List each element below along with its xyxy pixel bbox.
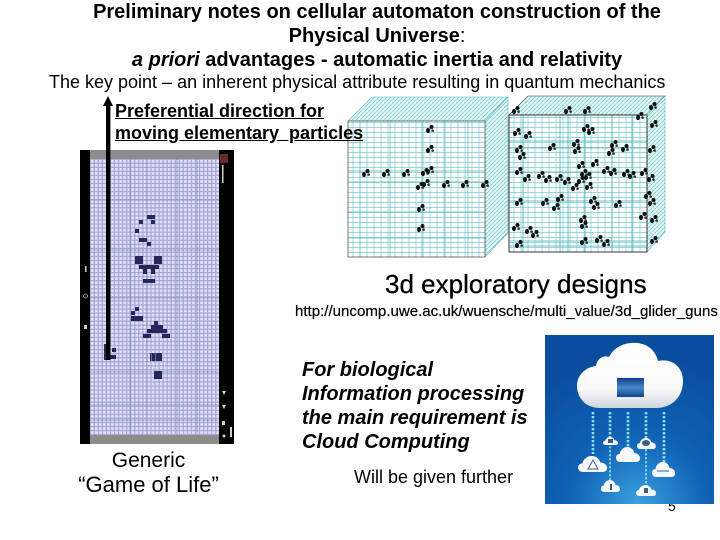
caption: Game of Life: Generic [112, 449, 185, 472]
cloud screen [617, 378, 644, 397]
text: cloud computing requirement: Cloud Computing [302, 431, 470, 453]
page number: 5 [668, 498, 676, 514]
right cube [509, 96, 665, 252]
title: Physical Universe: [289, 25, 465, 47]
text: cloud computing requirement: the main requirement is [302, 407, 528, 429]
title [93, 1, 661, 71]
link: source url: http://uncomp.uwe.ac.uk/wuensche/multi_value/3d_glider_guns [295, 303, 718, 320]
arrow: preferential direction [103, 96, 113, 360]
image: Game of Life screen [80, 150, 234, 444]
caption: 3d exploratory designs: 3d exploratory designs [385, 269, 647, 299]
label: preferential direction: Preferential direction for moving elementary particles [115, 101, 363, 143]
caption: Game of Life: “Game of Life” [78, 472, 219, 497]
caption: Game of Life [78, 449, 219, 497]
game of life side controls [84, 154, 232, 438]
image: cloud computing [545, 335, 714, 504]
small clouds [578, 437, 675, 496]
left cube [348, 97, 508, 257]
game of life live cells [104, 215, 170, 379]
text: cloud computing requirement [302, 359, 528, 453]
subtitle: key point: The key point – an inherent physical attribute resulting in quantum mechanics [49, 72, 665, 92]
text: cloud computing requirement: For biological [302, 359, 433, 381]
image: 3d glider cubes [347, 95, 666, 258]
text: will be given further: Will be given further [354, 467, 513, 487]
small cloud glyphs [588, 439, 669, 493]
text: cloud computing requirement: Information processing [302, 383, 524, 405]
title: a priori advantages - automatic inertia and relativity [132, 49, 622, 71]
dotted connectors [593, 412, 664, 485]
title: Preliminary notes on cellular automaton construction of the [93, 1, 661, 23]
main cloud [577, 343, 683, 408]
